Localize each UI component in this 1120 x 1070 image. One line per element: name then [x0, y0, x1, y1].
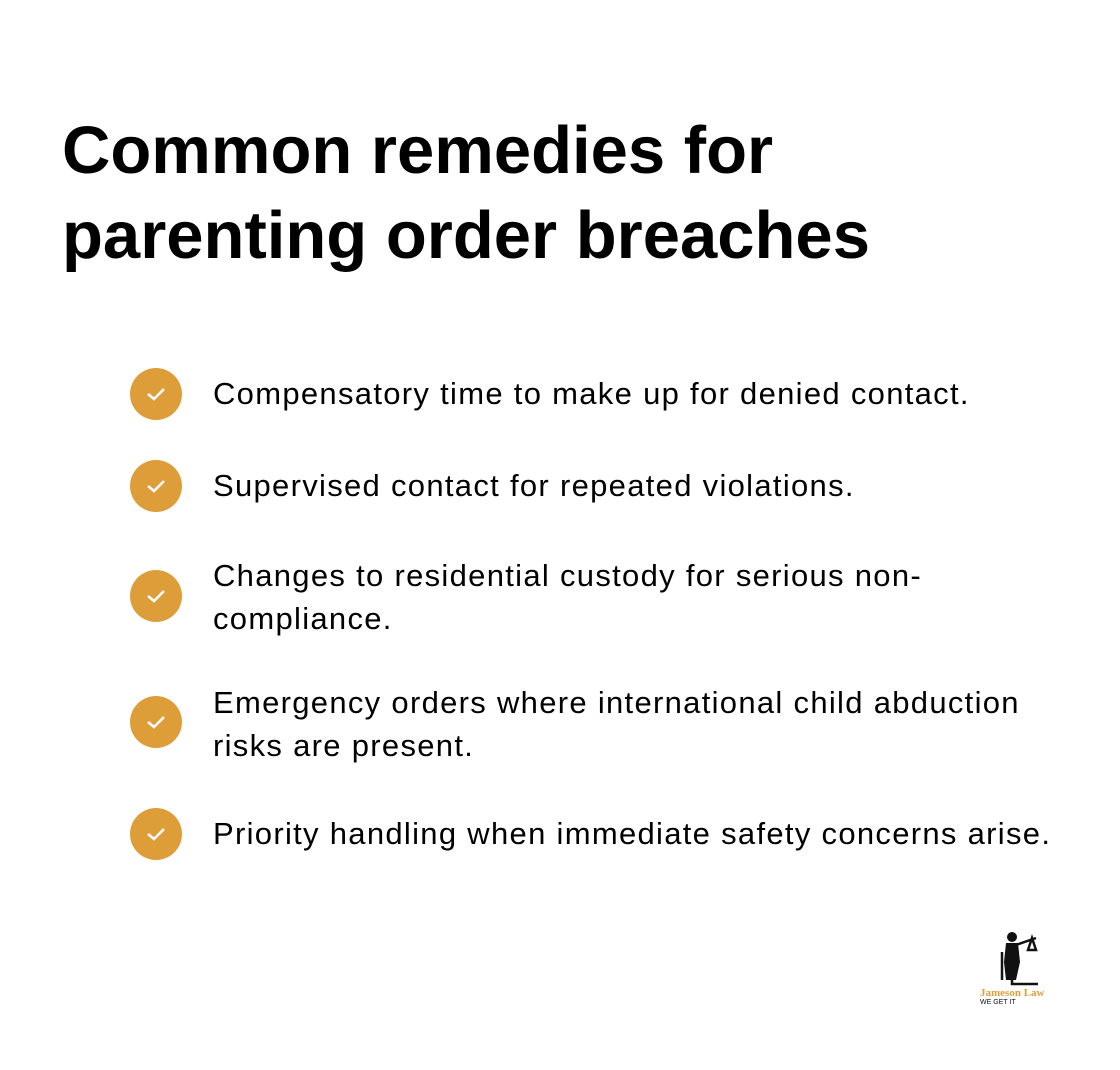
icon: check 3: [130, 570, 182, 622]
text 4: Emergency orders where international child abduction: [213, 685, 1020, 720]
item 5: [130, 808, 1051, 860]
icon: check 2: [130, 460, 182, 512]
item 1: [130, 368, 970, 420]
text 3: [213, 558, 922, 636]
logo text: Jameson Law: [980, 987, 1044, 999]
text 3: Changes to residential custody for serious non-: [213, 558, 922, 593]
text 3: compliance.: [213, 601, 393, 636]
text 4: [213, 685, 1020, 763]
text 4: risks are present.: [213, 728, 474, 763]
item 2: [130, 460, 855, 512]
text 2: Supervised contact for repeated violations.: [213, 468, 855, 503]
item 3: [130, 558, 922, 636]
logo text: [980, 987, 1044, 1006]
title: parenting order breaches: [62, 198, 870, 273]
icon: check 4: [130, 696, 182, 748]
icon: check 1: [130, 368, 182, 420]
logo: [980, 932, 1044, 1006]
text 1: Compensatory time to make up for denied contact.: [213, 376, 970, 411]
text 5: Priority handling when immediate safety concerns arise.: [213, 816, 1051, 851]
icon: check 5: [130, 808, 182, 860]
icon: justice figure: [1000, 932, 1038, 986]
logo text: WE GET IT: [980, 999, 1016, 1006]
title: [62, 113, 870, 273]
item 4: [130, 685, 1020, 763]
title: Common remedies for: [62, 113, 773, 188]
